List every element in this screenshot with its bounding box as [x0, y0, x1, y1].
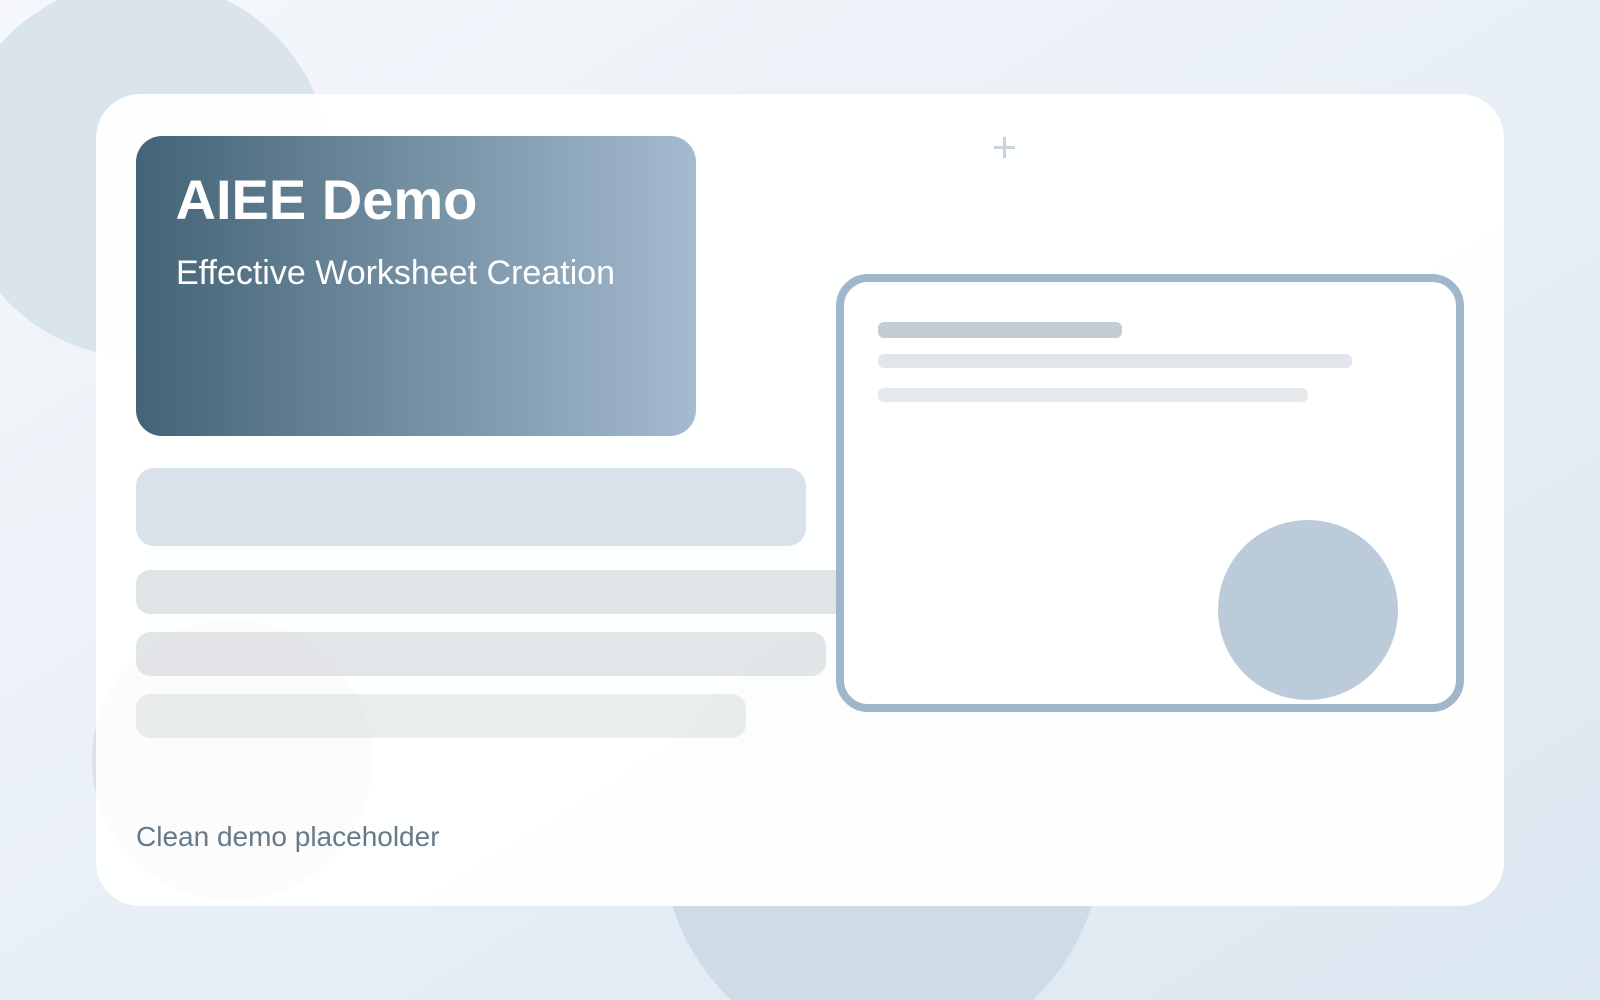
placeholder bar 2: [136, 632, 826, 676]
preview heading line: [878, 322, 1122, 338]
decorative circle: bottom left: [92, 620, 372, 900]
subtitle: Effective Worksheet Creation: [176, 254, 615, 292]
caption: Clean demo placeholder: [136, 821, 440, 852]
main card: [96, 94, 1504, 906]
placeholder block: [136, 468, 806, 546]
title: AIEE Demo: [176, 168, 477, 231]
preview circle: [1218, 520, 1398, 700]
preview text line 2: [878, 388, 1308, 402]
decorative circle: bottom centre: [662, 620, 1102, 1000]
placeholder bar 1: [136, 570, 856, 614]
placeholder bar 3: [136, 694, 746, 738]
hero banner: [136, 136, 696, 436]
decorative circle: top left: [0, 0, 331, 358]
preview text line 1: [878, 354, 1352, 368]
faint overlay circle: bottom left: [92, 620, 372, 900]
icon: plus: [994, 137, 1015, 158]
preview panel: [836, 274, 1464, 712]
faint overlay circle: bottom centre: [662, 620, 1102, 906]
